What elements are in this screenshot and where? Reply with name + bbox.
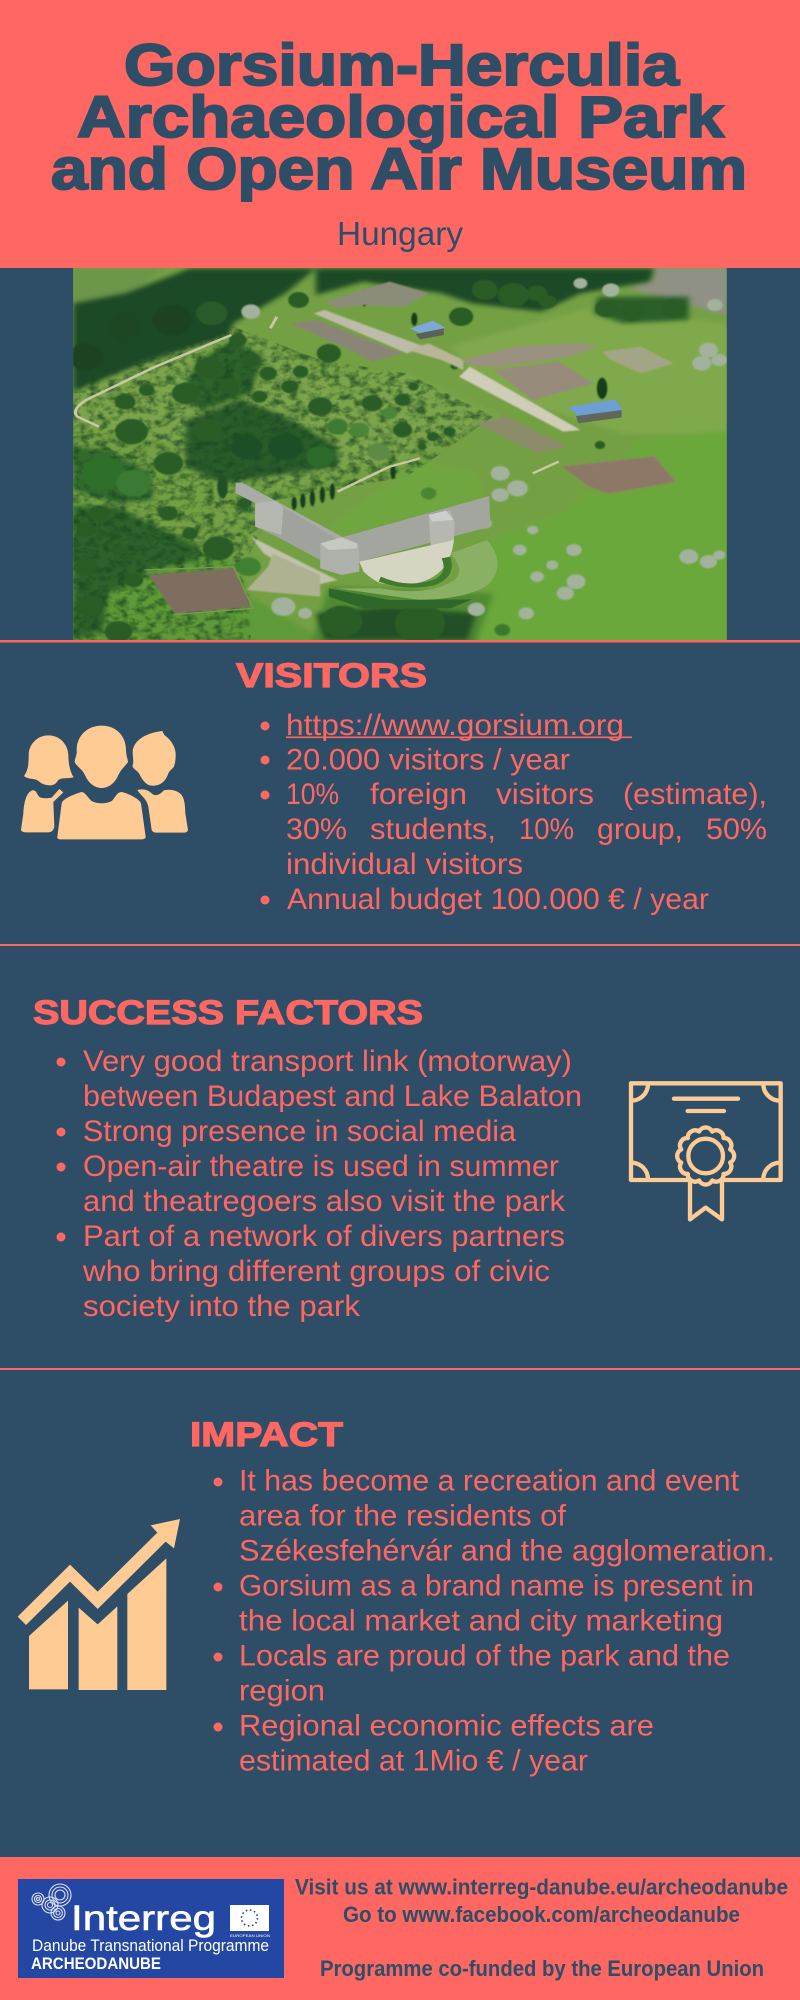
heading: impact: IMPACT (190, 1416, 343, 1454)
paths (75, 317, 559, 492)
visitors list: (estimate), (623, 778, 767, 811)
pale shrubs (241, 278, 727, 619)
impact list: Locals are proud of the park and the (239, 1640, 730, 1672)
EU flag (230, 1905, 270, 1938)
logo: Interreg Danube Transnational Programme (18, 1879, 284, 1978)
museum building (246, 537, 338, 597)
visitors list: group, (597, 813, 683, 846)
panel: impact (18, 1416, 775, 1778)
visitors list (260, 709, 767, 916)
impact list: Regional economic effects are (239, 1710, 654, 1742)
visitors list: Annual budget 100.000 € / year (287, 883, 709, 916)
logo: Interreg Danube Transnational Programme: ARCHEODANUBE (31, 1954, 161, 1973)
icon: rising bar chart with arrow (18, 1519, 180, 1690)
visitors list: individual visitors (286, 848, 523, 881)
icon: certificate (631, 1083, 781, 1219)
heading: visitors: VISITORS (236, 657, 427, 695)
title: and Open Air Museum (51, 137, 747, 202)
subtitle: country: Hungary (337, 215, 464, 252)
excavated plots (149, 457, 675, 613)
impact list (214, 1464, 775, 1778)
success factors list: Strong presence in social media (83, 1115, 516, 1148)
success factors list: society into the park (83, 1290, 361, 1323)
visitors list: 20.000 visitors / year (286, 744, 570, 776)
EU flag: EUROPEAN UNION (230, 1933, 270, 1938)
ruins (290, 282, 674, 453)
logo: Interreg Danube Transnational Programme: Interreg (71, 1899, 216, 1938)
logo rings (32, 1884, 71, 1920)
divider (0, 1368, 800, 1370)
shelters (410, 321, 445, 335)
impact list: It has become a recreation and event (239, 1464, 740, 1498)
panel: success factors (33, 994, 781, 1323)
visitors list: https://www.gorsium.org (286, 709, 624, 742)
amphitheatre (359, 540, 454, 585)
title: Gorsium-Herculia (124, 33, 680, 98)
impact list: region (239, 1674, 325, 1708)
visitors list: 10% (286, 778, 339, 811)
divider (0, 944, 800, 946)
visitors list: students, (370, 813, 496, 846)
title: Archaeological Park (77, 85, 725, 150)
icon: group of people (21, 726, 188, 839)
success factors list: who bring different groups of civic (82, 1255, 550, 1288)
footer panel (0, 1857, 800, 2000)
footer text: Go to www.facebook.com/archeodanube (343, 1902, 740, 1927)
impact list: Székesfehérvár and the agglomeration. (239, 1534, 775, 1568)
foliage texture (73, 327, 494, 640)
impact list: the local market and city marketing (239, 1604, 723, 1638)
success factors list: Open-air theatre is used in summer (83, 1150, 559, 1183)
aerial photo of the park (69, 268, 728, 643)
panel: visitors (21, 657, 767, 916)
visitors list: 10% (519, 813, 574, 846)
success factors list: and theatregoers also visit the park (83, 1185, 566, 1218)
title (51, 33, 747, 202)
visitors list: foreign (370, 778, 467, 811)
footer text: Programme co-funded by the European Union (320, 1956, 764, 1981)
success factors list: between Budapest and Lake Balaton (83, 1080, 582, 1113)
logo: Interreg Danube Transnational Programme: Danube Transnational Programme (32, 1936, 269, 1955)
impact list: Gorsium as a brand name is present in (239, 1570, 754, 1602)
footer text (295, 1874, 788, 1981)
success factors list: Part of a network of divers partners (83, 1220, 565, 1253)
visitors list: 30% (286, 813, 347, 846)
heading: success factors: SUCCESS FACTORS (33, 994, 423, 1032)
impact list: estimated at 1Mio € / year (239, 1744, 588, 1778)
header panel (0, 0, 800, 268)
divider under photo (0, 640, 800, 642)
success factors list (56, 1045, 582, 1323)
visitors list: 50% (706, 813, 767, 846)
park trees (69, 280, 686, 643)
success factors list: Very good transport link (motorway) (83, 1045, 572, 1078)
visitors list: visitors (496, 778, 594, 811)
impact list: area for the residents of (239, 1500, 567, 1532)
